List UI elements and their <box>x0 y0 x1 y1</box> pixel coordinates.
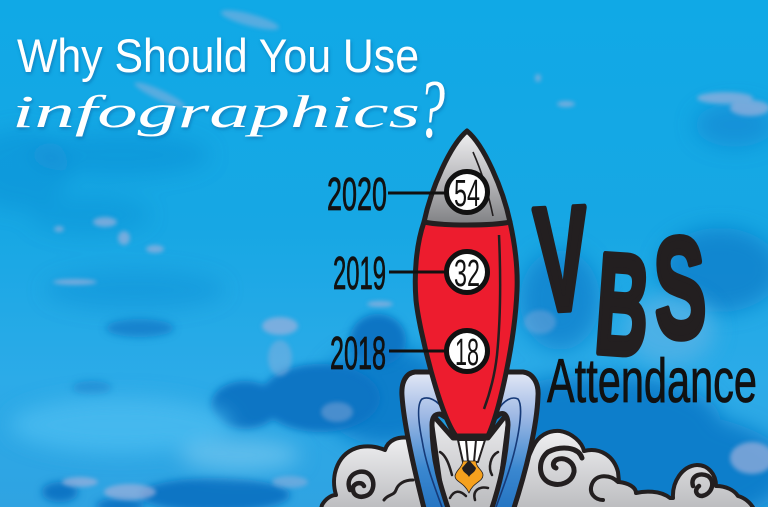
cloud: right <box>500 431 760 507</box>
letter B: B <box>591 224 654 387</box>
marker 2019: 32: 32 <box>454 253 480 295</box>
engine flame <box>455 461 483 493</box>
marker 2019: 32 <box>446 252 488 295</box>
marker 2020: 54 <box>446 172 488 215</box>
nose highlight line <box>473 152 493 216</box>
rocket nose <box>424 131 510 225</box>
exhaust curls <box>440 452 498 500</box>
year 2018: 2018 <box>330 327 386 379</box>
rocket <box>402 131 538 507</box>
year labels <box>327 168 387 379</box>
left fin <box>402 372 452 507</box>
year connector lines <box>388 193 447 351</box>
letter S: S <box>652 208 708 369</box>
year 2020: 2020 <box>327 168 387 220</box>
cloud swirls <box>349 448 712 500</box>
nozzle struts <box>458 440 485 462</box>
exhaust cloud <box>318 431 760 507</box>
marker 2018: 18: 18 <box>455 332 479 374</box>
body highlight line <box>484 235 500 409</box>
marker 2018: 18 <box>446 330 488 374</box>
right fin inner line <box>495 398 521 507</box>
year 2019: 2019 <box>333 247 386 299</box>
title line one: Why Should You Use <box>17 29 419 82</box>
nozzle core <box>462 460 476 477</box>
right fin <box>488 372 538 507</box>
engine interior <box>430 410 510 507</box>
rocket body <box>415 222 517 436</box>
letter V: V <box>531 176 593 343</box>
left fin inner line <box>419 398 443 507</box>
cloud: left <box>318 438 440 507</box>
title <box>12 29 445 156</box>
heading: VBS <box>531 176 708 387</box>
title line two: script: infographics <box>12 86 420 137</box>
title question mark: ? <box>418 63 445 156</box>
marker 2020: 54: 54 <box>454 173 480 215</box>
